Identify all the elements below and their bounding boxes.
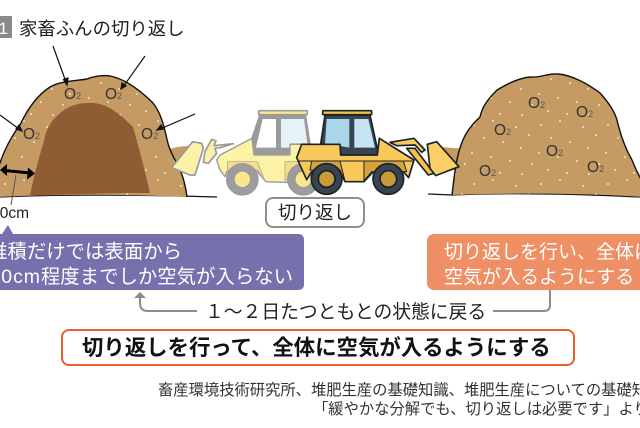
oxygen labels right heap: O2 — [546, 143, 563, 160]
windows — [325, 119, 375, 148]
number badge — [0, 16, 12, 38]
heading text: 家畜ふんの切り返し — [19, 18, 185, 39]
callout: after turning: 空気が入るようにする — [444, 266, 634, 288]
left manure heap — [0, 76, 192, 197]
heading — [0, 16, 185, 39]
faded roof — [259, 111, 307, 115]
oxygen labels left heap: O2 — [141, 126, 158, 143]
heap outline — [0, 76, 187, 197]
return line right — [493, 290, 550, 311]
roof — [323, 111, 372, 115]
heap outline — [452, 74, 640, 195]
heap dots — [0, 76, 187, 197]
body line — [297, 159, 413, 162]
depth double arrow — [0, 164, 35, 180]
oxygen labels left heap: O2 — [64, 86, 81, 103]
oxygen labels right heap — [479, 95, 604, 180]
oxygen labels left heap — [23, 86, 158, 143]
front wheel loader — [297, 111, 459, 194]
oxygen labels left heap: O2 — [105, 86, 122, 103]
ground line right — [428, 194, 640, 197]
label: turning: 切り返し — [278, 202, 352, 223]
oxygen labels right heap: O2 — [494, 122, 511, 139]
oxygen labels right heap: O2 — [576, 104, 593, 121]
right manure heap — [438, 74, 640, 197]
ground line left — [0, 195, 217, 197]
depth leader line — [11, 175, 16, 205]
arm — [390, 138, 425, 152]
lift arm — [407, 148, 434, 175]
heap dots — [452, 74, 640, 197]
fenders — [310, 161, 407, 181]
key message: 切り返しを行って、全体に空気が入るようにする — [82, 335, 551, 360]
faded arm — [203, 139, 233, 163]
faded cab — [252, 115, 310, 155]
label: turning — [266, 198, 364, 227]
bucket — [427, 142, 459, 176]
oxygen labels left heap: O2 — [23, 126, 40, 143]
body — [297, 138, 414, 182]
spilled dirt — [168, 145, 192, 170]
cab — [321, 115, 378, 155]
wheels — [311, 164, 404, 194]
heap core without air — [30, 103, 150, 196]
callout: piling only — [0, 225, 304, 290]
callout: after turning — [427, 234, 640, 290]
key message — [62, 330, 574, 365]
faded fenders — [227, 162, 302, 181]
source credit: 「緩やかな分解でも、切り返しは必要です」より — [313, 401, 640, 418]
heap outer — [0, 76, 187, 197]
return arrow left — [134, 292, 197, 311]
faded windows — [256, 119, 307, 148]
return caption: １〜２日たつともとの状態に戻る — [205, 301, 486, 322]
oxygen arrows into left heap — [0, 46, 195, 131]
oxygen labels right heap: O2 — [528, 95, 545, 112]
faded wheels — [227, 164, 319, 195]
faded bucket — [172, 142, 203, 175]
source credit — [158, 382, 640, 418]
faded wheel loader — [172, 111, 319, 195]
oxygen labels right heap: O2 — [479, 163, 496, 180]
faded body — [217, 138, 313, 183]
spilled dirt — [438, 147, 460, 172]
oxygen labels right heap: O2 — [587, 159, 604, 176]
heap fill — [452, 74, 640, 197]
